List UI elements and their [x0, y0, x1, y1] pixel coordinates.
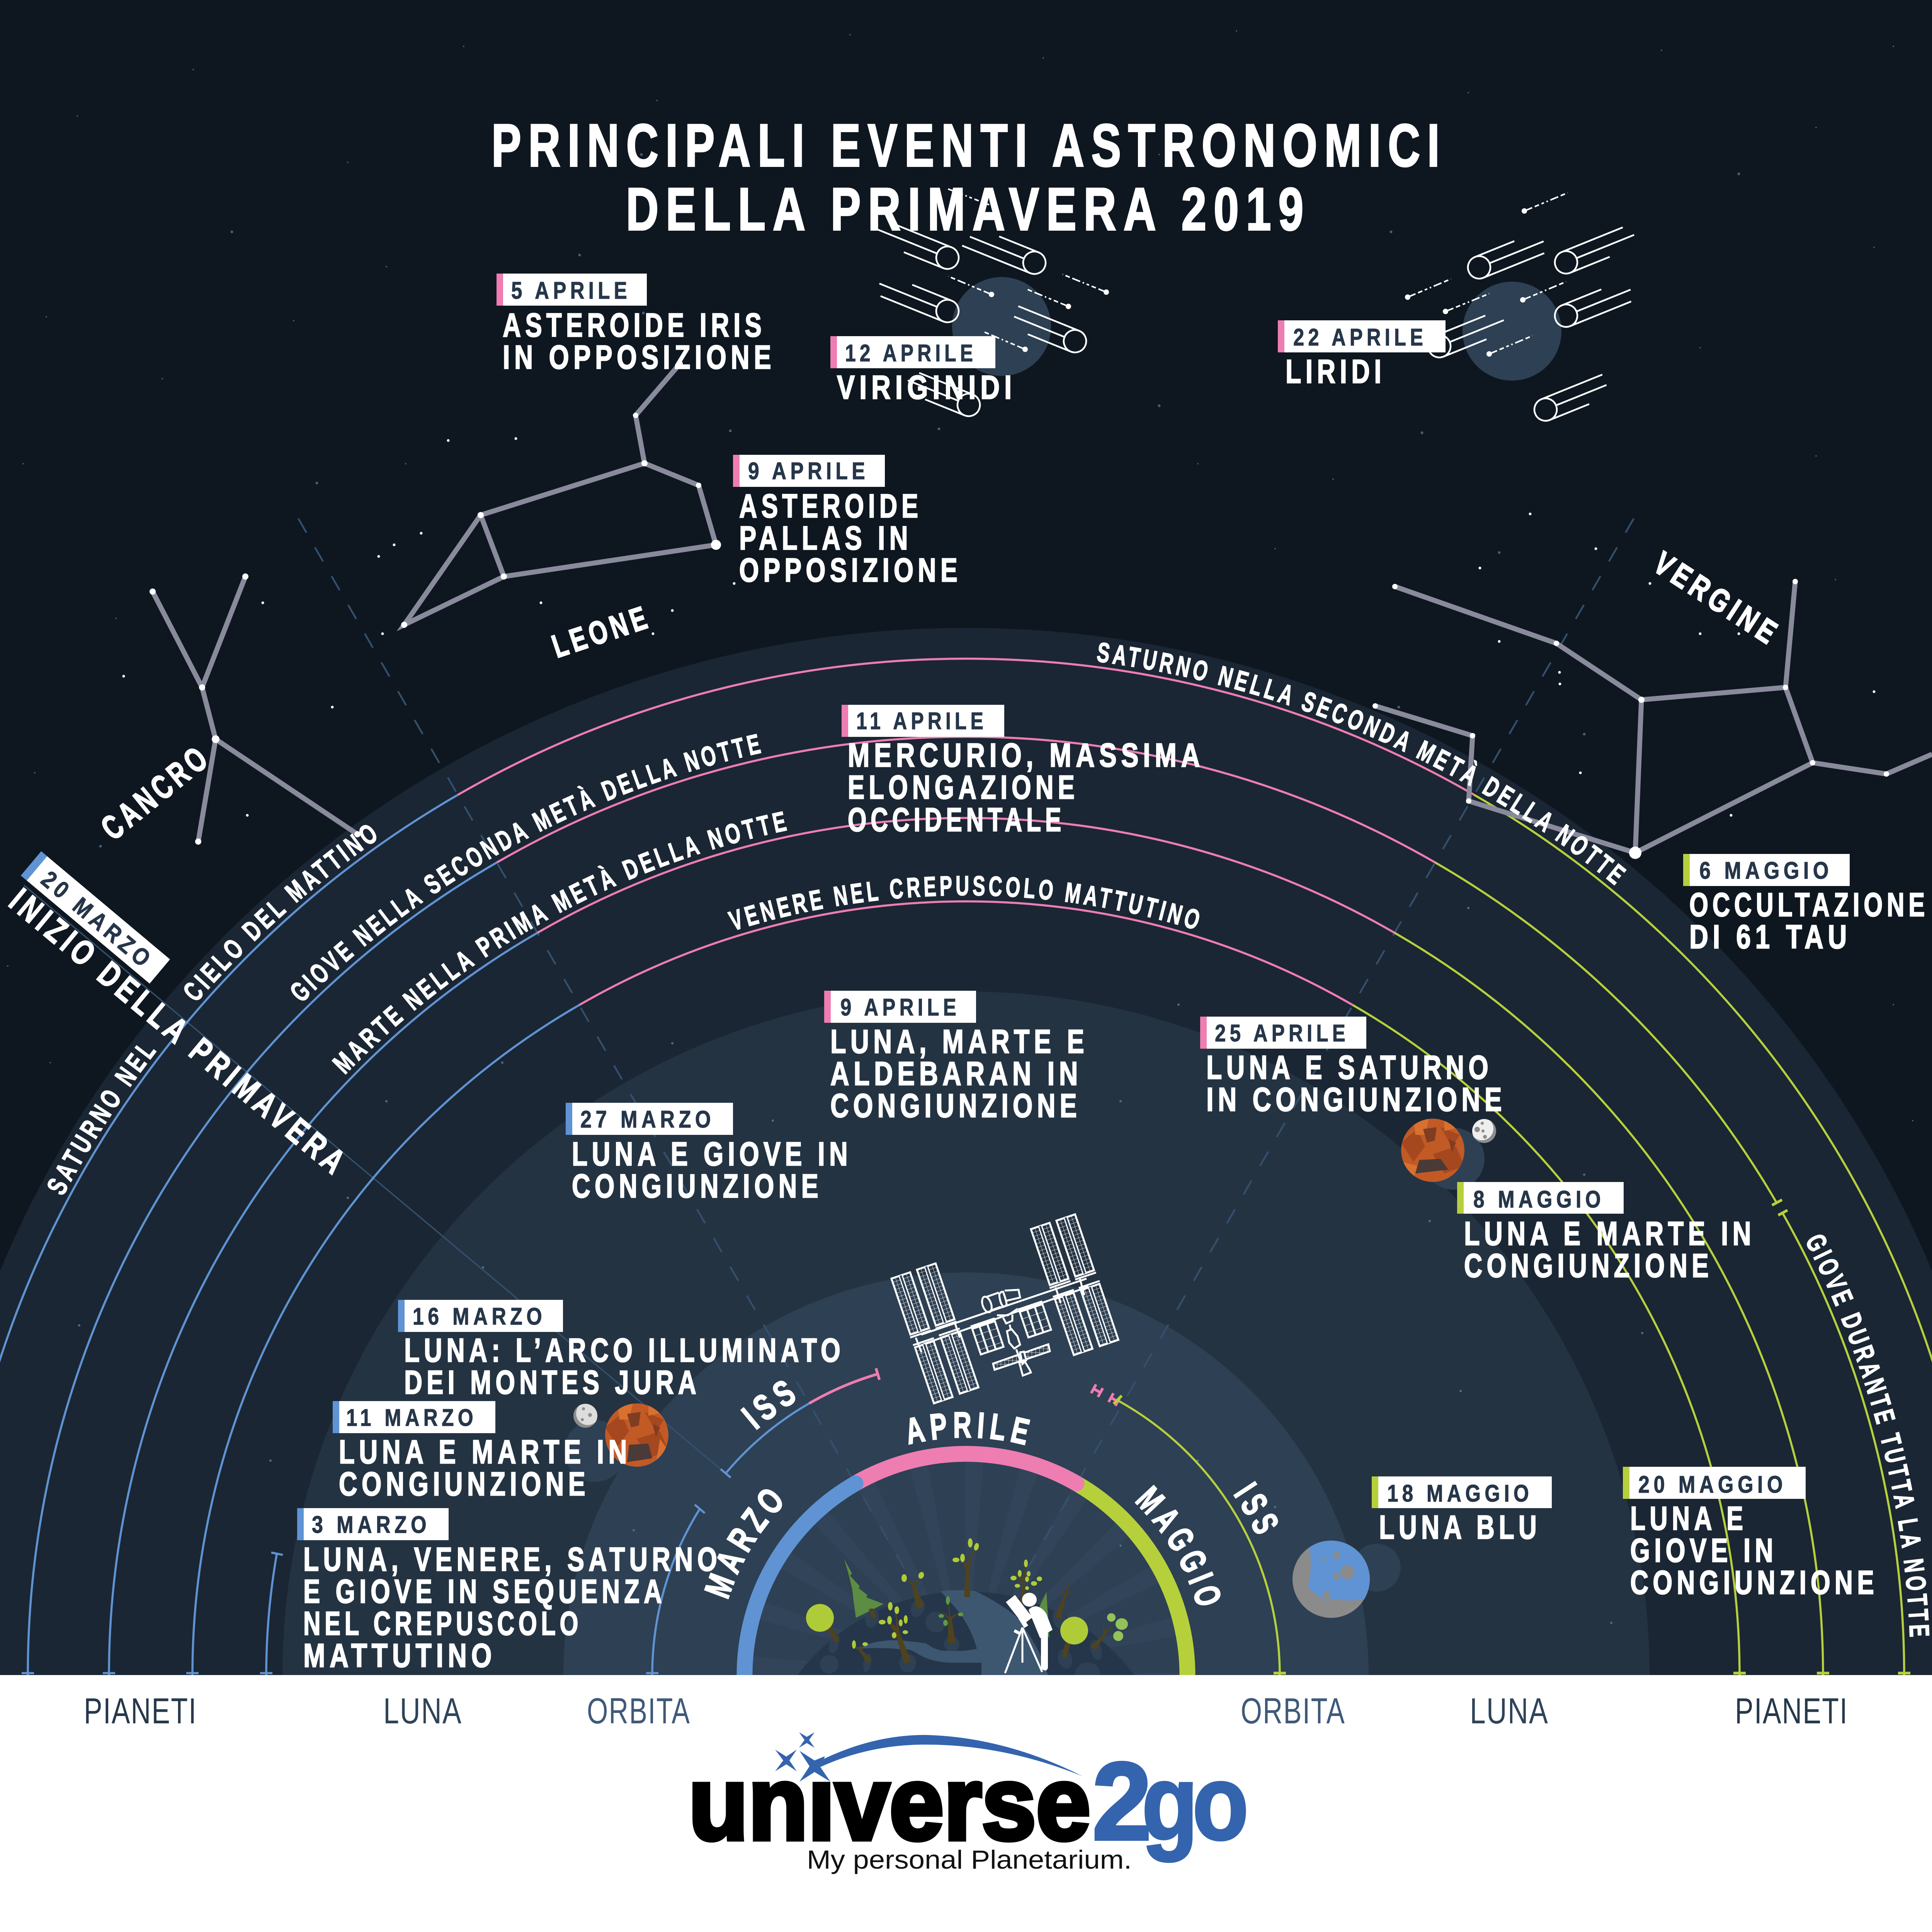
- arc label: Venere nel crepuscolo mattutino: VENERE NEL CREPUSCOLO MATTUTINO: [726, 871, 1206, 937]
- event: 25 aprile Luna Saturno: 25 APRILE: [1215, 1020, 1349, 1047]
- event: 16 marzo Montes Jura: LUNA: L’ARCO ILLUMINATO: [404, 1332, 845, 1369]
- event: 3 marzo sequenza mattutina: 3 MARZO: [312, 1512, 430, 1538]
- event: 9 aprile asteroide Pallas: [733, 455, 962, 589]
- meteors: Liridi: [1405, 193, 1638, 424]
- event: 11 aprile Mercurio: ELONGAZIONE: [848, 769, 1079, 806]
- event: 6 maggio occultazione: [1683, 854, 1929, 956]
- month ring: [745, 1454, 1187, 1675]
- band: orbit zone: [563, 1272, 1369, 1675]
- event: 3 marzo sequenza mattutina: [297, 1508, 721, 1674]
- leaves: [806, 1538, 1088, 1649]
- event: 20 maggio Luna Giove: GIOVE IN: [1630, 1532, 1777, 1569]
- event: 20 maggio Luna Giove: 20 MAGGIO: [1638, 1471, 1787, 1498]
- event: 5 aprile asteroide Iris: 5 APRILE: [511, 277, 631, 304]
- space station: [890, 1214, 1119, 1404]
- month: Maggio: MAGGIO: [1128, 1479, 1231, 1616]
- footer label: Pianeti right: PIANETI: [1735, 1690, 1848, 1731]
- event: 18 maggio Luna blu: [1372, 1476, 1552, 1546]
- inner sunburst rays: [859, 1568, 1073, 1675]
- event: 27 marzo Luna Giove: LUNA E GIOVE IN: [572, 1136, 852, 1173]
- event: 20 maggio Luna Giove: [1623, 1467, 1878, 1601]
- planet arcs, March: [0, 795, 809, 1675]
- event: 3 marzo sequenza mattutina: NEL CREPUSCOLO: [303, 1605, 582, 1642]
- footer label: Orbita left: ORBITA: [587, 1690, 690, 1731]
- planet arcs, April: [458, 659, 1474, 1406]
- Earth scene: [798, 1538, 1134, 1675]
- ground hollows: [820, 1589, 1102, 1675]
- arc label: Saturno nella seconda metà della notte: SATURNO NELLA SECONDA METÀ DELLA NOTTE: [1095, 637, 1633, 893]
- modules: [980, 1296, 993, 1313]
- telescope: [1005, 1599, 1042, 1673]
- event: 12 aprile Virginidi: VIRIGINIDI: [837, 369, 1016, 406]
- pine small: [1036, 1592, 1049, 1638]
- event: 11 aprile Mercurio: [842, 705, 1204, 838]
- truss: [916, 1279, 1088, 1352]
- event: 18 maggio Luna blu: LUNA BLU: [1379, 1509, 1541, 1546]
- logo swoosh: [815, 1735, 1083, 1776]
- hill: [798, 1591, 1134, 1675]
- blue moon: [1293, 1541, 1401, 1618]
- event: 11 marzo Luna Marte: LUNA E MARTE IN: [339, 1434, 631, 1471]
- event: 11 marzo Luna Marte: CONGIUNZIONE: [339, 1466, 590, 1503]
- event: 22 aprile Liridi: LIRIDI: [1286, 353, 1386, 390]
- constellation name: Vergine: VERGINE: [1647, 544, 1787, 653]
- meteor shower backdrop: Liridi: [1463, 282, 1561, 381]
- arc label: ISS May: ISS: [1226, 1476, 1289, 1544]
- constellation: Leone: [401, 361, 721, 628]
- event: 5 aprile asteroide Iris: [497, 274, 776, 376]
- event: 6 maggio occultazione: DI 61 TAU: [1689, 918, 1851, 956]
- meteors: Virginidi: [873, 189, 1109, 420]
- logo i-dot mask: [804, 1741, 840, 1781]
- event: 9 aprile Luna Marte Aldebaran: 9 APRILE: [840, 994, 960, 1021]
- event: 12 aprile Virginidi: 12 APRILE: [845, 340, 977, 367]
- radial dashed line: end of March: [298, 519, 906, 1571]
- event: 16 marzo Montes Jura: 16 MARZO: [413, 1303, 546, 1330]
- logo tagline: My personal Planetarium.: [807, 1845, 1132, 1874]
- footer label: Luna right: LUNA: [1470, 1690, 1549, 1731]
- river: [855, 1590, 1048, 1675]
- event: 27 marzo Luna Giove: CONGIUNZIONE: [572, 1168, 823, 1205]
- event: 8 maggio Luna Marte: 8 MAGGIO: [1473, 1186, 1605, 1213]
- meteor shower backdrop: Virginidi: [952, 277, 1051, 376]
- event: 3 marzo sequenza mattutina: E GIOVE IN SEQUENZA: [303, 1573, 666, 1610]
- planet: Mars and Moon, May: [1401, 1117, 1496, 1190]
- arc label: Saturno nel cielo del mattino: CIELO DEL MATTINO: [177, 816, 386, 1007]
- heading: inizio della primavera: INIZIO DELLA PRIMAVERA: [2, 881, 356, 1184]
- event: 12 aprile Virginidi: [830, 336, 1016, 406]
- event: 11 aprile Mercurio: MERCURIO, MASSIMA: [848, 737, 1204, 774]
- event: 18 maggio Luna blu: 18 MAGGIO: [1387, 1480, 1533, 1507]
- arc label: Saturno nel cielo del mattino: SATURNO NEL: [41, 1033, 163, 1200]
- event: 16 marzo Montes Jura: DEI MONTES JURA: [404, 1364, 701, 1401]
- event: 9 aprile Luna Marte Aldebaran: ALDEBARAN IN: [830, 1055, 1082, 1092]
- logo wordmark: universe: [689, 1745, 1090, 1862]
- event: 25 aprile Luna Saturno: LUNA E SATURNO: [1206, 1049, 1493, 1086]
- event: 27 marzo Luna Giove: 27 MARZO: [580, 1106, 715, 1133]
- event: 16 marzo Montes Jura: [398, 1300, 845, 1401]
- event: 9 aprile Luna Marte Aldebaran: LUNA, MARTE E: [830, 1023, 1088, 1060]
- footer label: Orbita right: ORBITA: [1241, 1690, 1345, 1731]
- dark leaves: [939, 1596, 963, 1626]
- event: 11 aprile Mercurio: 11 APRILE: [856, 708, 987, 735]
- event: 9 aprile asteroide Pallas: 9 APRILE: [748, 458, 869, 485]
- event: 6 maggio occultazione: 6 MAGGIO: [1699, 857, 1833, 884]
- event: 9 aprile asteroide Pallas: OPPOSIZIONE: [739, 552, 962, 589]
- event: 27 marzo Luna Giove: [566, 1103, 852, 1205]
- footer label: Pianeti left: PIANETI: [84, 1690, 197, 1731]
- event: 8 maggio Luna Marte: LUNA E MARTE IN: [1464, 1215, 1755, 1252]
- constellation name: Leone: LEONE: [548, 598, 655, 665]
- event: 3 marzo sequenza mattutina: LUNA, VENERE, SATURNO: [303, 1541, 721, 1578]
- event: 22 aprile Liridi: 22 APRILE: [1293, 324, 1427, 351]
- event: 5 aprile asteroide Iris: IN OPPOSIZIONE: [503, 339, 776, 376]
- band: planets zone: [0, 628, 1932, 1675]
- month: Aprile: APRILE: [902, 1405, 1038, 1454]
- event: 22 aprile Liridi: [1278, 320, 1446, 390]
- event: 11 marzo Luna Marte: [333, 1401, 631, 1503]
- pine: [844, 1559, 884, 1618]
- event: 9 aprile asteroide Pallas: ASTEROIDE: [739, 488, 922, 525]
- logo wordmark: 2: [1092, 1740, 1151, 1863]
- background stars: [8, 31, 1913, 1236]
- event: 11 aprile Mercurio: OCCIDENTALE: [848, 801, 1065, 838]
- light leaves: [1107, 1613, 1128, 1641]
- event: 5 aprile asteroide Iris: ASTEROIDE IRIS: [503, 307, 766, 344]
- logo stars: [775, 1732, 830, 1782]
- event: 3 marzo sequenza mattutina: MATTUTINO: [303, 1637, 496, 1674]
- title: PRINCIPALI EVENTI ASTRONOMICI: [492, 112, 1447, 179]
- label: 20 marzo: 20 MARZO: [36, 866, 158, 975]
- constellation: Cancro: [150, 573, 361, 845]
- arc label: Marte nella prima metà della notte: MARTE NELLA PRIMA METÀ DELLA NOTTE: [327, 805, 792, 1080]
- trunks: [827, 1549, 1113, 1663]
- event: 9 aprile Luna Marte Aldebaran: CONGIUNZIONE: [830, 1087, 1081, 1124]
- event: 20 maggio Luna Giove: LUNA E: [1630, 1500, 1747, 1537]
- radial line: start of spring: [24, 885, 726, 1473]
- title: [492, 112, 1447, 243]
- footer label: Luna left: LUNA: [383, 1690, 462, 1731]
- arc label: Giove durante tutta la notte: GIOVE DURANTE TUTTA LA NOTTE: [1799, 1229, 1932, 1641]
- planet: Mars and Moon, March: [564, 1402, 668, 1482]
- constellation name: Cancro: CANCRO: [94, 737, 218, 847]
- arc label: Saturno nel cielo del mattino: [41, 816, 386, 1200]
- event: 25 aprile Luna Saturno: IN CONGIUNZIONE: [1206, 1081, 1506, 1118]
- logo wordmark: go: [1142, 1743, 1245, 1862]
- month: Marzo: MARZO: [697, 1476, 795, 1603]
- band: moon zone: [282, 992, 1650, 1675]
- arc label: ISS March-April: ISS: [735, 1369, 807, 1437]
- event: 11 marzo Luna Marte: 11 MARZO: [346, 1405, 477, 1431]
- planet arcs, May: [1114, 795, 1932, 1675]
- event: 8 maggio Luna Marte: [1457, 1182, 1755, 1284]
- title: DELLA PRIMAVERA 2019: [626, 176, 1311, 243]
- radial dashed line: end of April: [1026, 519, 1634, 1571]
- observer: [1022, 1593, 1053, 1670]
- logo: universe2go: [689, 1732, 1245, 1874]
- event: 8 maggio Luna Marte: CONGIUNZIONE: [1464, 1247, 1713, 1284]
- band stars: [79, 908, 1719, 1623]
- event: 25 aprile Luna Saturno: [1200, 1017, 1506, 1118]
- event: 9 aprile asteroide Pallas: PALLAS IN: [739, 520, 912, 557]
- arc label: Giove nella seconda metà della notte: GIOVE NELLA SECONDA METÀ DELLA NOTTE: [284, 728, 766, 1008]
- white footer: [0, 1675, 1932, 1932]
- event: 9 aprile Luna Marte Aldebaran: [824, 991, 1088, 1124]
- constellation: Vergine: [1372, 579, 1932, 859]
